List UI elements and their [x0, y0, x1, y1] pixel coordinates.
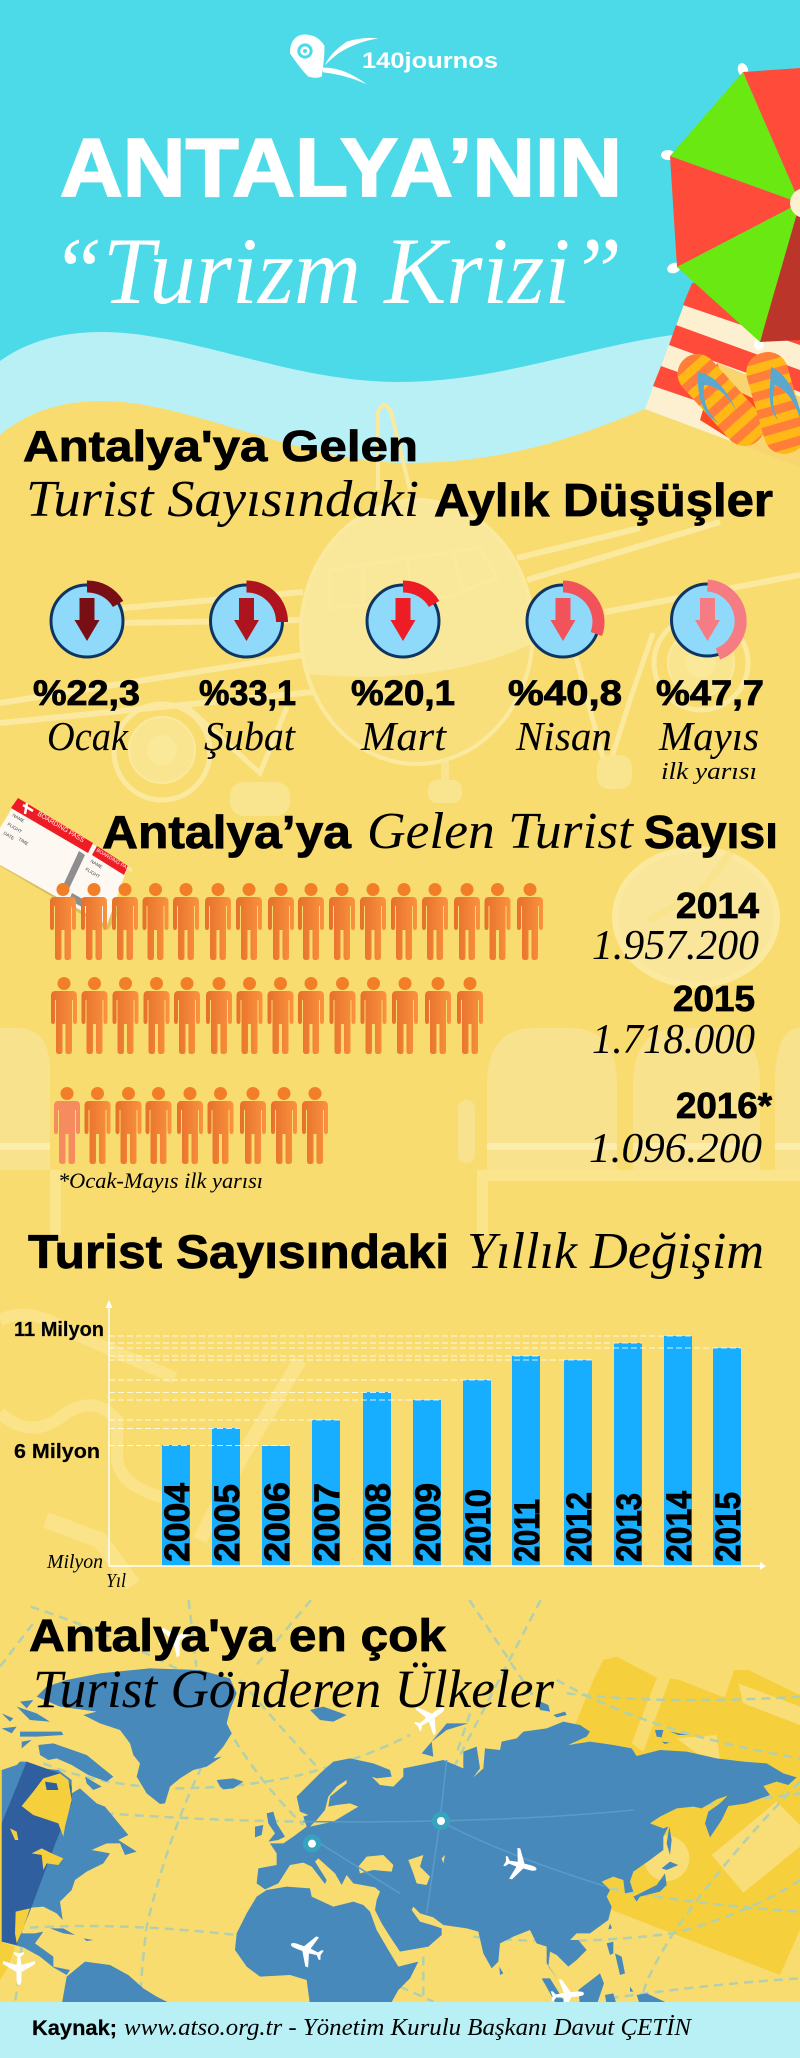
logo wordmark: 140journos — [362, 48, 498, 73]
gauge: Ocak: %22,3 — [33, 674, 140, 713]
icon: boarding passes — [0, 798, 134, 930]
icon: boarding passes: BOARDING PASS — [95, 848, 134, 874]
title line 2: “Turizm Krizi” — [51, 218, 622, 324]
heading: yearly change: Yıllık Değişim — [467, 1223, 764, 1280]
icon: boarding passes: DATE — [2, 831, 15, 841]
gauge: Mart — [351, 585, 455, 759]
icon: boarding passes: NAME — [89, 859, 103, 870]
logo mark — [290, 34, 378, 84]
year values — [589, 885, 772, 1172]
Hudson Bay and lakes — [0, 1770, 72, 1980]
heading: top source countries: Antalya'ya en çok — [29, 1610, 447, 1661]
flip-flop right — [746, 352, 800, 454]
heading: tourist count: Gelen Turist — [367, 803, 635, 860]
dashed guide lines — [109, 1336, 741, 1446]
seas — [310, 1780, 445, 1885]
location pin: Europe — [303, 1835, 321, 1853]
faint routes over land — [303, 1760, 633, 1913]
gauge: Nisan: %40,8 — [508, 674, 622, 713]
title line 1: ANTALYA’NIN — [60, 121, 622, 214]
icon: boarding passes: FLIGHT — [84, 867, 101, 879]
illustration: towel and flip-flops — [645, 283, 800, 467]
gauge: Nisan — [508, 585, 622, 759]
islands in Hudson Bay — [45, 1782, 58, 1790]
South America — [62, 1962, 173, 2005]
background: suitcase — [567, 1657, 800, 1975]
background: faint seats — [0, 1028, 800, 1235]
shaded overlay on North America — [2, 1762, 72, 1945]
heading: monthly declines: Antalya'ya Gelen — [23, 422, 418, 471]
gauge: Mart: %20,1 — [351, 674, 455, 713]
light blue wave — [0, 332, 800, 520]
gauge: Şubat — [199, 585, 297, 759]
year labels — [158, 1482, 748, 1562]
Eurasia — [257, 1722, 797, 1980]
year labels: 2011 — [508, 1499, 547, 1562]
background: faint airplane — [0, 400, 800, 816]
background: faint clock — [615, 849, 777, 985]
axes — [106, 1300, 766, 1570]
gauge: Şubat: Şubat — [204, 713, 297, 759]
pictogram: 2014 — [50, 883, 543, 960]
axis labels: 6 Milyon — [14, 1441, 100, 1463]
year values: 2015 — [673, 978, 755, 1019]
heading: top source countries: Turist Gönderen Ülkeler — [33, 1659, 555, 1719]
axis labels: 11 Milyon — [14, 1319, 104, 1341]
year values: 2014 — [676, 885, 759, 926]
gauge: Mart: Mart — [360, 713, 448, 759]
axis labels: Milyon — [46, 1551, 103, 1573]
heading: tourist count: Sayısı — [644, 806, 778, 858]
year values: 1.957.200 — [592, 923, 759, 969]
axis labels — [14, 1319, 126, 1592]
year labels: 2012 — [560, 1492, 599, 1562]
year labels: 2009 — [409, 1483, 448, 1562]
arctic and other islands — [2, 1700, 113, 1790]
icon: boarding passes: BOARDING PASS — [36, 811, 86, 845]
icon: boarding passes: FLIGHT — [6, 822, 23, 834]
year labels: 2005 — [208, 1484, 247, 1562]
logo: 140journos — [290, 34, 498, 84]
footer source — [0, 2002, 800, 2058]
year labels: 2004 — [158, 1482, 197, 1562]
year values: 1.096.200 — [589, 1126, 762, 1172]
sky background — [0, 0, 800, 520]
footer source: Kaynak; — [32, 2017, 117, 2040]
North America — [2, 1762, 137, 1975]
gauge: Mayıs — [656, 584, 764, 785]
flip-flop left — [678, 354, 763, 446]
year labels: 2015 — [709, 1492, 748, 1562]
heading: monthly declines: Turist Sayısındaki — [26, 471, 419, 528]
year labels: 2014 — [660, 1491, 699, 1562]
year labels: 2010 — [459, 1489, 498, 1562]
Africa — [235, 1887, 418, 2005]
icon: boarding passes: NAME — [11, 813, 25, 824]
year values: 2016* — [676, 1085, 772, 1126]
year labels: 2007 — [308, 1483, 347, 1562]
gauge: Mayıs: %47,7 — [656, 674, 764, 713]
year labels: 2006 — [258, 1482, 297, 1562]
Greenland — [37, 1668, 237, 1804]
year labels: 2008 — [359, 1483, 398, 1562]
gauge: Ocak — [33, 585, 140, 759]
footer source: www.atso.org.tr - Yönetim Kurulu Başkanı Davut ÇETİN — [124, 2015, 693, 2041]
gauge: Nisan: Nisan — [515, 713, 612, 759]
heading: monthly declines — [23, 422, 773, 528]
gauge: Mayıs: ilk yarısı — [661, 759, 757, 785]
world map — [0, 1600, 800, 2005]
heading: monthly declines: Aylık Düşüşler — [434, 474, 773, 526]
year labels: 2013 — [610, 1493, 649, 1562]
axis labels: Yıl — [106, 1570, 126, 1592]
bar chart: yearly tourists — [14, 1300, 766, 1592]
icon: boarding passes: TIME — [17, 837, 29, 846]
year values: 1.718.000 — [592, 1017, 755, 1063]
heading: tourist count: Antalya’ya — [102, 806, 351, 858]
bars — [162, 1336, 741, 1566]
airplanes on map — [3, 1618, 585, 2012]
flight routes — [0, 1600, 800, 2002]
gauge: Ocak: Ocak — [47, 713, 129, 759]
background: faint road pattern — [0, 1315, 300, 1585]
heading: yearly change — [28, 1223, 764, 1280]
towel — [645, 283, 800, 467]
pictogram: 2015 — [51, 977, 483, 1054]
location pin: Russia — [432, 1812, 450, 1830]
heading: yearly change: Turist Sayısındaki — [28, 1225, 449, 1278]
heading: tourist count — [102, 803, 778, 860]
gauge: Mayıs: Mayıs — [658, 713, 759, 759]
illustration: beach umbrella — [661, 62, 800, 350]
continents — [2, 1668, 797, 2005]
footnote: *Ocak-Mayıs ilk yarısı — [58, 1168, 263, 1193]
panel: monthly decline gauges — [33, 584, 764, 785]
title — [51, 121, 622, 324]
pictogram: 2016 — [54, 1087, 328, 1164]
gauge: Şubat: %33,1 — [199, 674, 296, 713]
heading: top source countries — [29, 1610, 555, 1719]
